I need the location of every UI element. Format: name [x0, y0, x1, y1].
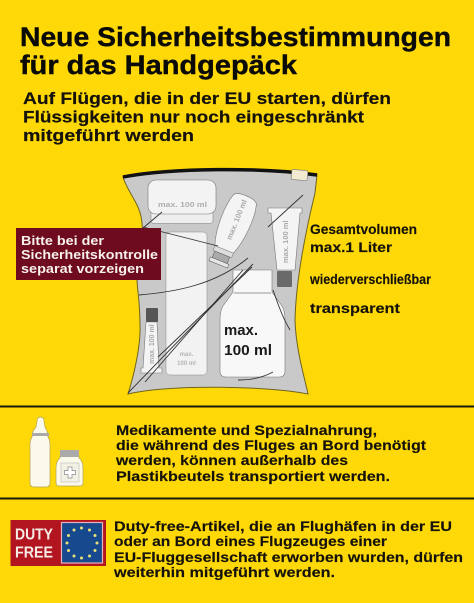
icon: duty free EU badge: DUTY [15, 526, 53, 544]
bag properties labels [309, 221, 431, 316]
icon: baby bottle [30, 417, 50, 487]
bag properties labels: Gesamtvolumen [310, 221, 417, 237]
tall bottle: max. [180, 352, 194, 358]
subtitle: mitgeführt werden [23, 126, 194, 145]
jar: max. 100 ml [158, 200, 207, 209]
icon: medicine jar [56, 450, 83, 486]
zip slider [291, 169, 308, 181]
callout: show separately: Bitte bei der [21, 234, 104, 248]
plastic bag illustration [123, 169, 317, 394]
medicine text: Plastikbeutels transportiert werden. [116, 468, 390, 484]
duty free text [113, 518, 463, 580]
large bottle: 100 ml [224, 342, 272, 359]
subtitle: Auf Flügen, die in der EU starten, dürfen [23, 89, 391, 108]
duty free text: EU-Fluggesellschaft erworben wurden, dürfen [114, 549, 463, 565]
medicine text: Medikamente und Spezialnahrung, [116, 422, 377, 438]
bag crease lines [128, 195, 303, 393]
icon: EU stars [66, 526, 98, 560]
title [20, 22, 451, 80]
medicine text: werden, können außerhalb des [115, 452, 348, 468]
subtitle: Flüssigkeiten nur noch eingeschränkt [23, 108, 364, 126]
jar [148, 180, 216, 224]
right tube: max. 100 ml [281, 220, 290, 263]
bag properties labels: transparent [310, 300, 400, 316]
bag properties labels: wiederverschließbar [309, 271, 431, 287]
icon: duty free EU badge [10, 520, 106, 566]
bag body [123, 170, 317, 394]
icon: baby bottle and medicine jar [30, 417, 83, 487]
left tube: max. 100 ml [149, 324, 156, 364]
dropper bottle [204, 190, 260, 270]
callout: show separately: separat vorzeigen [21, 262, 144, 276]
title: Neue Sicherheitsbestimmungen [20, 22, 451, 52]
icon: duty free EU badge: FREE [15, 544, 53, 562]
large bottle [220, 270, 285, 377]
tall bottle [166, 232, 207, 375]
bag properties labels: max.1 Liter [310, 239, 393, 255]
left tube [141, 308, 162, 373]
tall bottle: 100 ml [177, 361, 196, 367]
medicine text [115, 422, 426, 484]
medicine text: die während des Fluges an Bord benötigt [116, 437, 426, 453]
large bottle: max. [224, 322, 258, 339]
duty free text: weiterhin mitgeführt werden. [113, 564, 335, 580]
dropper bottle: max. 100 ml [225, 198, 249, 241]
subtitle [23, 89, 391, 145]
title: für das Handgepäck [20, 50, 297, 80]
duty free text: oder an Bord eines Flugzeuges einer [114, 533, 388, 549]
callout: show separately [16, 228, 161, 280]
zip closure [123, 170, 317, 177]
right tube [268, 208, 302, 287]
duty free text: Duty-free-Artikel, die an Flughäfen in der EU [114, 518, 452, 534]
callout: show separately: Sicherheitskontrolle [21, 248, 158, 262]
